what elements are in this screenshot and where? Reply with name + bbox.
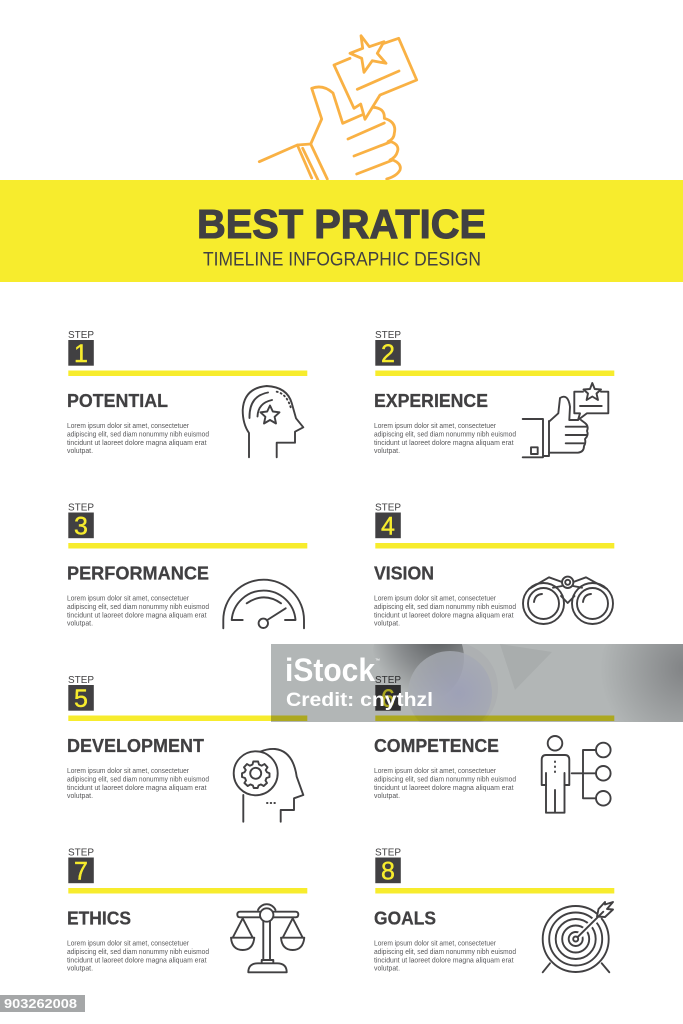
panel: step 5 development: DEVELOPMENT	[67, 735, 205, 756]
panel: step 6 competence: STEP	[375, 674, 401, 686]
panel: step 1 potential: tincidunt ut laoreet dolore magna aliquam erat	[67, 440, 207, 447]
panel: step 1 potential: Lorem ipsum dolor sit amet, consectetuer	[67, 423, 190, 430]
panel: step 3 performance: volutpat.	[67, 620, 93, 628]
icon: speedometer gauge	[223, 580, 304, 628]
panel: step 7 ethics: STEP	[68, 846, 94, 858]
panel: step 2 experience: adipiscing elit, sed diam nonummy nibh euismod	[374, 432, 516, 438]
panel: step 3 performance: PERFORMANCE	[67, 562, 209, 584]
panel: step 7 ethics: Lorem ipsum dolor sit amet, consectetuer	[67, 940, 190, 948]
panel: step 4 vision: STEP	[375, 502, 401, 514]
panel: step 4 vision	[374, 502, 614, 628]
panel: step 4 vision: adipiscing elit, sed diam nonummy nibh euismod	[374, 604, 516, 611]
watermark: iStock credit: iStock	[285, 652, 375, 688]
panel: step 5 development: 5	[74, 685, 88, 713]
icon: binoculars	[523, 577, 613, 624]
panel: step 1 potential: 1	[74, 340, 88, 368]
panel: step 4 vision: tincidunt ut laoreet dolore magna aliquam erat	[374, 612, 514, 620]
panel: step 5 development: Lorem ipsum dolor sit amet, consectetuer	[67, 768, 190, 775]
panel: step 8 goals: 8	[381, 858, 395, 886]
hero icon: thumbs up with star card	[259, 36, 417, 180]
panel: step 5 development: volutpat.	[67, 793, 93, 800]
panel: step 7 ethics: volutpat.	[67, 966, 93, 972]
panel: step 1 potential: POTENTIAL	[67, 390, 168, 411]
panel: step 5 development: STEP	[68, 674, 94, 686]
panel: step 7 ethics: ETHICS	[67, 908, 131, 928]
title: BEST PRATICE	[197, 201, 486, 247]
panel: step 2 experience: tincidunt ut laoreet dolore magna aliquam erat	[374, 440, 514, 447]
yellow title band	[0, 180, 683, 282]
panel: step 6 competence: 6	[381, 685, 395, 713]
icon: head with star	[243, 386, 303, 457]
panel: step 7 ethics: 7	[74, 858, 88, 886]
panel: step 8 goals: volutpat.	[374, 966, 400, 972]
panel: step 7 ethics: adipiscing elit, sed diam nonummy nibh euismod	[67, 949, 209, 956]
panel: step 1 potential	[67, 329, 307, 457]
panel: step 2 experience: STEP	[375, 329, 401, 341]
panel: step 4 vision: Lorem ipsum dolor sit amet, consectetuer	[374, 596, 497, 602]
panel: step 5 development: tincidunt ut laoreet dolore magna aliquam erat	[67, 785, 207, 792]
panel: step 6 competence: Lorem ipsum dolor sit amet, consectetuer	[374, 768, 497, 775]
panel: step 4 vision: VISION	[374, 562, 434, 584]
panel: step 1 potential: adipiscing elit, sed diam nonummy nibh euismod	[67, 432, 209, 438]
panel: step 1 potential: volutpat.	[67, 448, 93, 455]
panel: step 6 competence: adipiscing elit, sed diam nonummy nibh euismod	[374, 776, 516, 784]
panel: step 6 competence: volutpat.	[374, 793, 400, 800]
panel: step 3 performance: Lorem ipsum dolor sit amet, consectetuer	[67, 596, 190, 602]
panel: step 3 performance: adipiscing elit, sed diam nonummy nibh euismod	[67, 604, 209, 611]
panel: step 8 goals	[374, 846, 614, 972]
icon: thumbs up with star card	[523, 383, 608, 457]
panel: step 7 ethics	[67, 846, 307, 972]
subtitle: TIMELINE INFOGRAPHIC DESIGN	[203, 250, 481, 270]
icon: balance scale	[231, 904, 304, 972]
icon: target with arrow	[543, 902, 613, 972]
panel: step 3 performance: 3	[74, 512, 88, 540]
panel: step 5 development: adipiscing elit, sed diam nonummy nibh euismod	[67, 776, 209, 784]
stock image id tag	[0, 995, 85, 1012]
stock image id tag: 903262008	[4, 997, 77, 1011]
panel: step 4 vision: volutpat.	[374, 620, 400, 628]
panel: step 8 goals: Lorem ipsum dolor sit amet, consectetuer	[374, 940, 497, 948]
panel: step 8 goals: tincidunt ut laoreet dolore magna aliquam erat	[374, 958, 514, 964]
panel: step 2 experience: 2	[381, 340, 395, 368]
panel: step 2 experience	[374, 329, 614, 457]
panel: step 6 competence	[374, 674, 614, 813]
watermark: iStock credit: ™	[375, 658, 380, 664]
panel: step 3 performance: STEP	[68, 502, 94, 514]
panel: step 5 development	[67, 674, 307, 822]
panel: step 3 performance: tincidunt ut laoreet dolore magna aliquam erat	[67, 612, 207, 620]
panel: step 3 performance	[67, 502, 307, 628]
panel: step 8 goals: STEP	[375, 846, 401, 858]
icon: head with gear	[234, 749, 303, 822]
panel: step 8 goals: adipiscing elit, sed diam nonummy nibh euismod	[374, 949, 516, 956]
panel: step 6 competence: tincidunt ut laoreet dolore magna aliquam erat	[374, 785, 514, 792]
panel: step 4 vision: 4	[381, 512, 395, 540]
icon: person with connected nodes	[542, 736, 611, 813]
panel: step 2 experience: volutpat.	[374, 448, 400, 455]
panel: step 6 competence: COMPETENCE	[374, 735, 499, 756]
panel: step 2 experience: Lorem ipsum dolor sit amet, consectetuer	[374, 423, 497, 430]
panel: step 2 experience: EXPERIENCE	[374, 390, 488, 411]
panel: step 1 potential: STEP	[68, 329, 94, 341]
watermark: iStock credit: Credit: cnythzl	[286, 690, 433, 711]
watermark: iStock credit	[271, 644, 683, 722]
panel: step 7 ethics: tincidunt ut laoreet dolore magna aliquam erat	[67, 958, 207, 964]
panel: step 8 goals: GOALS	[374, 908, 436, 928]
